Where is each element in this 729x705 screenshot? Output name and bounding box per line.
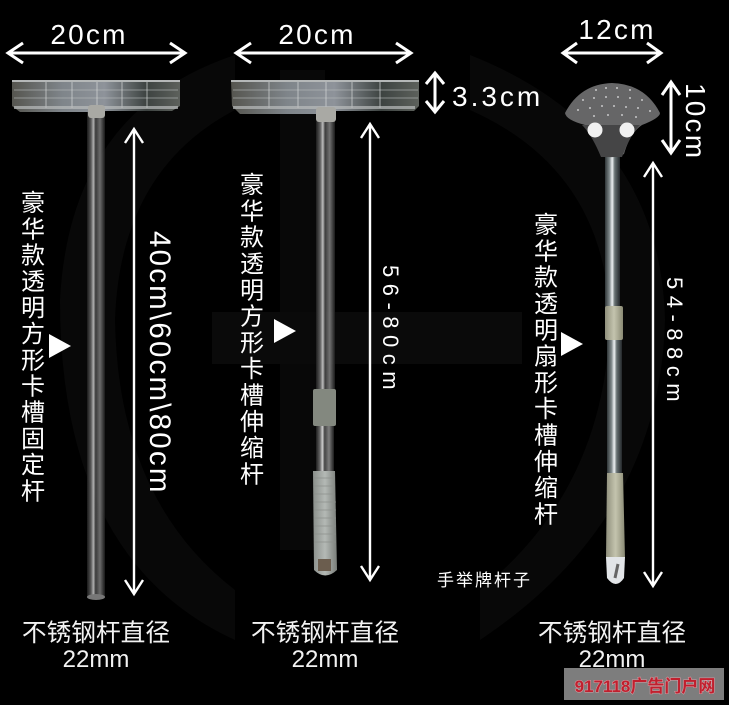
- caption: product 1: 22mm: [63, 646, 129, 673]
- upper rod: [316, 112, 335, 392]
- width arrow: product 1: [8, 43, 185, 63]
- caption: product 2: [251, 619, 399, 673]
- brand note: 手举牌杆子: [437, 571, 532, 590]
- rod shaft: [87, 112, 105, 598]
- lower rod: [316, 425, 334, 473]
- rod end cap: [87, 594, 105, 600]
- width arrow: product 2: [236, 43, 411, 63]
- caption: product 1: [22, 619, 170, 673]
- vertical name: product 3: 豪华款透明扇形卡槽伸缩杆: [530, 212, 558, 528]
- end cap: [606, 557, 625, 584]
- length arrow: product 1: [125, 129, 143, 594]
- textured grip: [313, 471, 337, 576]
- height arrow: 3.3cm: [426, 73, 444, 112]
- square clip head: [12, 80, 180, 118]
- product 2: telescopic rod: [231, 80, 419, 576]
- vertical name: product 2: 豪华款透明方形卡槽伸缩杆: [236, 172, 264, 488]
- width arrow: product 3: [563, 43, 661, 63]
- fan head: [565, 83, 660, 157]
- watermark badge: [564, 668, 724, 700]
- upper rod: [605, 156, 620, 311]
- watermark background: [60, 55, 665, 640]
- collar: [313, 389, 336, 426]
- lower rod: [607, 338, 622, 488]
- caption: product 1: 不锈钢杆直径: [22, 619, 170, 647]
- label: 56-80cm: 56-80cm: [378, 265, 403, 396]
- watermark badge: 917118广告门户网: [575, 676, 715, 696]
- caption: product 2: 22mm: [292, 646, 358, 673]
- pointer triangle: product 1: [49, 334, 71, 358]
- pointer triangle: product 3: [561, 332, 583, 356]
- label: 12cm: 12cm: [578, 14, 656, 45]
- caption: product 2: 不锈钢杆直径: [251, 619, 399, 647]
- label: 3.3cm: 3.3cm: [452, 81, 543, 112]
- product 1: fixed rod: [12, 80, 180, 600]
- product 3: fan-head telescopic rod: [565, 83, 660, 584]
- vertical name: product 1: 豪华款透明方形卡槽固定杆: [16, 190, 44, 504]
- pointer triangle: product 2: [274, 319, 296, 343]
- label: 20cm: 20cm: [50, 19, 128, 50]
- height arrow: 10cm: [662, 82, 680, 153]
- length arrow: product 2: [361, 124, 379, 580]
- label: 54-88cm: 54-88cm: [662, 277, 687, 408]
- square clip head: [231, 80, 419, 122]
- label: 40cm\60cm\80cm: 40cm\60cm\80cm: [143, 231, 176, 495]
- caption: product 3: 不锈钢杆直径: [538, 619, 686, 647]
- caption: product 3: [538, 619, 686, 673]
- length arrow: product 3: [644, 163, 662, 586]
- label: 10cm: 10cm: [680, 83, 711, 160]
- grip: [606, 473, 625, 558]
- collar: [605, 306, 623, 340]
- label: 20cm: 20cm: [278, 19, 356, 50]
- caption: product 3: 22mm: [579, 646, 645, 673]
